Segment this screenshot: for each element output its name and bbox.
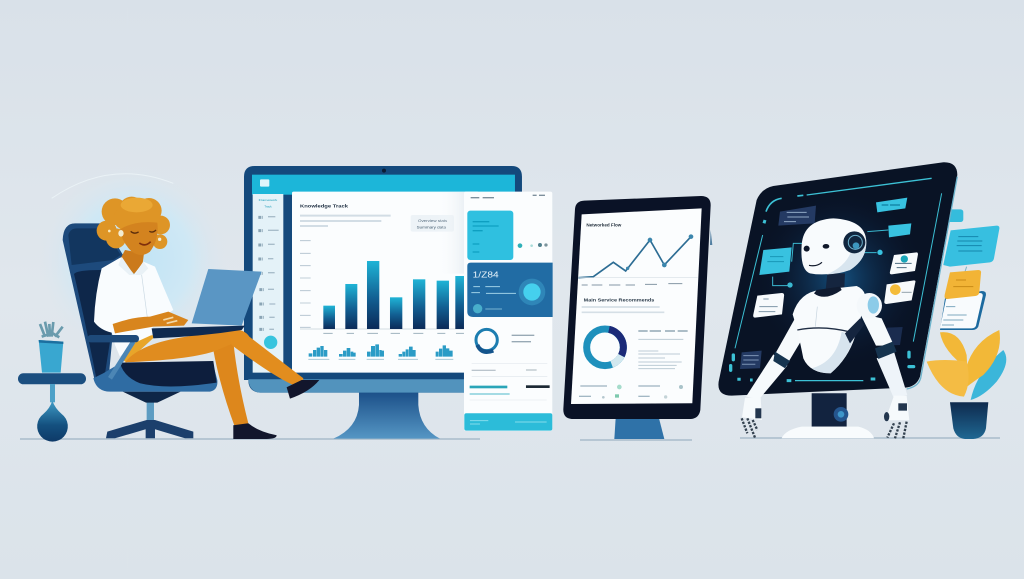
dark data box lower right [885, 327, 903, 346]
shoe on floor [233, 423, 277, 439]
mini bar charts [308, 344, 453, 359]
robot [742, 218, 909, 438]
raised shoe [287, 380, 319, 399]
ear sensor [843, 231, 865, 253]
tablet frame [563, 196, 711, 419]
right arm [860, 313, 894, 346]
dark data box lower left [740, 351, 762, 369]
small cyan tag [948, 209, 963, 222]
donut legend text [638, 329, 688, 333]
table top [18, 373, 86, 384]
robot pedestal [782, 393, 874, 438]
cyan label left [759, 243, 805, 288]
screen frame [718, 162, 957, 396]
eyes and mouth [804, 246, 810, 252]
head [801, 218, 866, 274]
dashed circuit border [731, 178, 942, 381]
footer stats [579, 385, 683, 399]
white card yellow icon [884, 280, 915, 304]
line chart [578, 234, 698, 285]
text lines and progress bars [470, 363, 550, 400]
monitor stand [333, 392, 440, 439]
yellow leaves [940, 332, 967, 368]
top bar [252, 175, 515, 195]
screen glow [757, 192, 923, 365]
shoulder joint [857, 293, 882, 318]
face [120, 222, 158, 255]
white card teal icon [890, 252, 918, 274]
panel: woman in chair with laptop [18, 165, 319, 442]
panel: robot screen [718, 162, 1006, 439]
left arm [776, 318, 807, 362]
potted plant [927, 330, 1006, 439]
crossed leg [227, 329, 303, 388]
blue-edged white card [940, 291, 986, 330]
skirt [123, 335, 157, 362]
plant pot [950, 402, 988, 439]
panel: tablet [563, 196, 712, 439]
table stem [50, 384, 55, 402]
status dots [518, 243, 548, 248]
plant pot [39, 340, 63, 373]
white card left [753, 293, 784, 318]
cyan leaves [971, 350, 1006, 400]
side panel [464, 192, 553, 431]
chair back [63, 223, 124, 382]
tablet heading: Networked Flow [586, 223, 622, 228]
shirt [94, 257, 173, 357]
blue stat card: 1/Z84 [473, 269, 499, 279]
lower leg [213, 342, 248, 427]
earrings [118, 230, 124, 237]
text lines [300, 216, 391, 226]
cyan label middle [865, 223, 911, 255]
laptop [152, 269, 262, 338]
footer bar [464, 413, 552, 431]
tablet stand [614, 418, 664, 439]
glow [38, 165, 228, 355]
ground line [20, 438, 1000, 440]
vase [37, 401, 68, 442]
plant leaves [40, 322, 63, 337]
donut chart [587, 329, 623, 366]
text lines [582, 307, 664, 312]
neck [825, 273, 845, 297]
neck [121, 250, 144, 274]
callout [411, 215, 454, 232]
sidebar: Framework [259, 198, 278, 202]
facial features [131, 230, 156, 233]
side table with plant [18, 322, 86, 442]
panel heading: Knowledge Track [300, 203, 348, 209]
bar chart [300, 241, 465, 333]
blue stat card [467, 263, 553, 317]
floating cards [940, 209, 999, 330]
left hand [742, 398, 762, 420]
shirt collar [118, 257, 148, 275]
cyan card [467, 211, 513, 260]
callout: Overview stats [418, 219, 448, 223]
sidebar: Track [264, 204, 272, 208]
hair [97, 197, 170, 249]
chair seat [93, 363, 217, 392]
panel: desktop monitor [244, 166, 553, 439]
dark data box top [778, 206, 816, 226]
callout: Summary data [417, 225, 446, 229]
thigh [125, 328, 237, 362]
cyan card [943, 226, 999, 267]
main chart panel [292, 192, 479, 373]
cyan label top [876, 198, 907, 212]
armrest [87, 335, 139, 378]
sidebar [253, 194, 283, 373]
tablet screen [571, 208, 702, 404]
forearm and hand [113, 312, 188, 333]
torso [793, 286, 866, 373]
monitor frame [244, 166, 522, 393]
ring chart [476, 329, 534, 352]
chair base [147, 393, 154, 422]
yellow card [945, 270, 981, 299]
woman [94, 197, 319, 439]
section heading: Main Service Recommends [584, 297, 655, 302]
logo icon [260, 179, 269, 187]
office chair [63, 223, 217, 438]
right hand [885, 396, 909, 420]
